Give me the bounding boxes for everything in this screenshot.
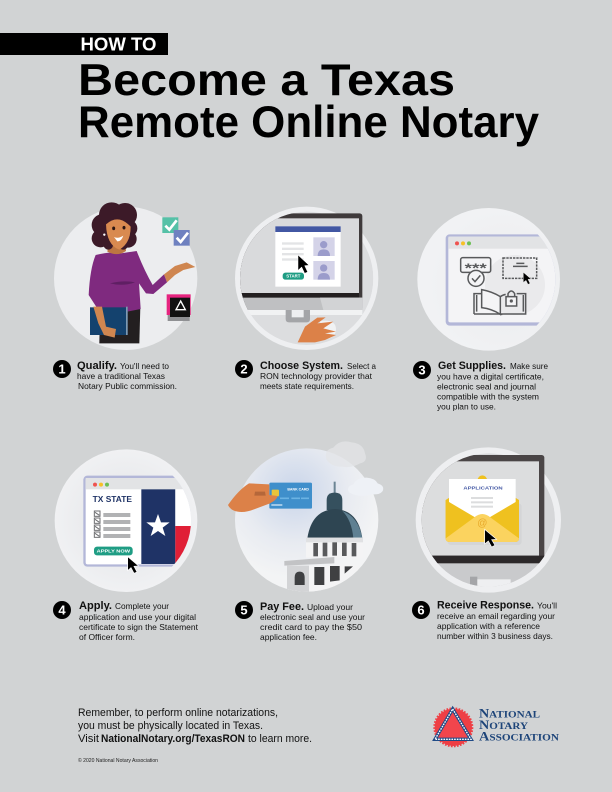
icon: cursor xyxy=(523,272,531,284)
panel: step 4 text: Apply. xyxy=(79,600,112,612)
panel: step 2 text: Select a xyxy=(347,361,376,371)
icon: bank card xyxy=(269,483,312,509)
panel: step 5 text: application fee. xyxy=(260,632,317,642)
logo wordmark xyxy=(479,707,559,744)
panel: step 5 text: electronic seal and use your xyxy=(260,612,365,622)
panel: step 4 text: Complete your xyxy=(115,601,169,611)
panel: step 1 text: You'll need to xyxy=(120,361,169,371)
panel: step 1 text: 1 xyxy=(58,362,66,377)
panel: step 1 illustration, qualify xyxy=(54,202,197,350)
panel: step 2 text xyxy=(235,360,376,391)
panel: step 2 text: meets state requirements. xyxy=(260,381,354,391)
panel: step 1 text: Qualify. xyxy=(77,360,117,372)
footer reminder text: Visit xyxy=(78,733,100,745)
panel: step 3 text: Make sure xyxy=(510,361,548,371)
icon: envelope with application: @ xyxy=(477,518,487,529)
icon: computer monitor xyxy=(240,212,373,345)
title xyxy=(78,56,539,147)
footer reminder text: NationalNotary.org/TexasRON xyxy=(101,733,245,745)
icon: web page with start button: START xyxy=(286,274,301,279)
icon: password with check mark xyxy=(461,258,491,286)
copyright: © 2020 National Notary Association xyxy=(78,757,158,764)
logo wordmark: NOTARY xyxy=(479,718,528,732)
panel: step 6 text: number within 3 business days. xyxy=(437,631,553,641)
panel: step 2 text: 2 xyxy=(240,362,248,377)
panel: step 5 text: Upload your xyxy=(307,602,353,612)
icon: digital seal xyxy=(503,258,537,278)
icon: password with check mark: *** xyxy=(465,260,488,275)
how to banner xyxy=(0,33,168,55)
footer reminder text: Remember, to perform online notarizations, xyxy=(78,707,278,719)
footer reminder text: you must be physically located in Texas. xyxy=(78,720,263,732)
panel: step 1 text: have a traditional Texas xyxy=(77,371,165,381)
panel: step 1 text xyxy=(53,360,177,391)
icon: web page with start button xyxy=(275,226,341,287)
panel: step 3 text: compatible with the system xyxy=(437,392,539,402)
icon: bank card: BANK CARD xyxy=(287,487,310,491)
panel: step 4 text: 4 xyxy=(58,603,66,618)
panel: step 6 text: Receive Response. xyxy=(437,600,534,612)
icon: cursor xyxy=(298,255,309,273)
panel: step 4 text: of Officer form. xyxy=(79,632,135,642)
footer reminder text xyxy=(78,707,312,745)
panel: step 5 text xyxy=(235,601,365,642)
panel: step 3 text: 3 xyxy=(418,363,426,378)
panel: step 2 text: RON technology provider that xyxy=(260,371,373,381)
icon: envelope with application: APPLICATION xyxy=(463,486,503,491)
panel: step 6 illustration, receive response xyxy=(405,447,561,593)
panel: step 5 text: 5 xyxy=(240,603,248,618)
logo wordmark: NATIONAL xyxy=(479,707,541,721)
panel: step 5 illustration, pay fee xyxy=(228,441,383,592)
form checklist xyxy=(94,511,130,538)
icon: envelope with application xyxy=(446,475,522,545)
panel: step 4 text xyxy=(53,600,199,642)
panel: step 4 illustration, apply xyxy=(55,449,197,592)
logo wordmark: ASSOCIATION xyxy=(479,730,559,744)
title: Become a Texas xyxy=(78,56,455,105)
icon: green checkbox xyxy=(162,217,178,233)
panel: step 1 text: Notary Public commission. xyxy=(78,381,177,391)
panel: step 4 text: certificate to sign the Statement xyxy=(79,622,199,632)
panel: step 2 illustration, choose system xyxy=(222,207,378,350)
panel: step 2 text: Choose System. xyxy=(260,360,343,372)
icon: large cloud xyxy=(326,441,366,467)
logo: National Notary Association xyxy=(435,707,559,746)
icon: browser window xyxy=(446,234,559,326)
icon: hand holding card xyxy=(228,483,278,512)
panel: step 6 text: You'll xyxy=(537,600,557,610)
panel: step 3 text: you have a digital certificate, xyxy=(437,372,544,382)
panel: step 3 text xyxy=(413,360,548,412)
panel: step 6 text: 6 xyxy=(417,603,425,618)
icon: small cloud xyxy=(348,478,383,496)
panel: step 3 text: electronic seal and journal xyxy=(437,382,536,392)
title: Remote Online Notary xyxy=(78,98,539,147)
panel: step 6 text xyxy=(412,600,557,641)
icon: hand on mouse xyxy=(298,317,336,342)
icon: cursor xyxy=(485,529,497,547)
icon: browser window with Texas flag xyxy=(83,476,197,567)
panel: step 4 text: application and use your digital xyxy=(79,612,196,622)
panel: step 3 text: you plan to use. xyxy=(437,402,496,412)
footer reminder text: to learn more. xyxy=(248,733,312,745)
icon: blue checkbox xyxy=(174,230,190,246)
icon: capitol building xyxy=(284,482,363,592)
heading: TX State: TX STATE xyxy=(93,495,133,504)
how to banner: HOW TO xyxy=(80,35,156,55)
button: apply now: APPLY NOW xyxy=(97,549,131,554)
icon: cursor xyxy=(128,557,139,573)
icon: woman with folder xyxy=(89,202,195,343)
icon: journal with padlock xyxy=(474,290,526,314)
panel: step 5 text: Pay Fee. xyxy=(260,601,304,613)
button: apply now xyxy=(94,547,133,555)
panel: step 6 text: application with a reference xyxy=(437,621,540,631)
panel: step 5 text: credit card to pay the $50 xyxy=(260,622,362,632)
icon: red seal with triangle xyxy=(435,709,472,746)
panel: step 3 text: Get Supplies. xyxy=(438,360,506,372)
panel: step 6 text: receive an email regarding your xyxy=(437,611,555,621)
icon: computer monitor xyxy=(422,454,555,586)
icon: notary stamp xyxy=(167,294,191,321)
panel: step 3 illustration, get supplies xyxy=(417,208,560,351)
